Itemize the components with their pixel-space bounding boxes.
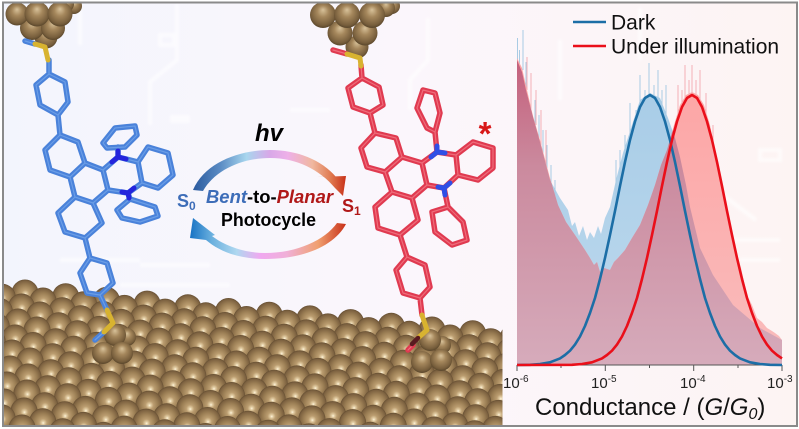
blue molecule S0: [25, 41, 173, 340]
x axis title: Conductance / (G/G: [535, 394, 748, 421]
label: hv: hv: [255, 120, 285, 147]
label: Bent-to-Planar: Bent-to-Planar: [206, 187, 334, 207]
tick labels: 10: [767, 375, 784, 392]
tick labels: -3: [784, 374, 793, 385]
tick labels: -5: [608, 374, 617, 385]
red adatom cluster: [411, 329, 452, 373]
overlap of histograms: [517, 58, 782, 365]
blue histogram: [517, 60, 782, 365]
legend: Under illumination: [611, 36, 779, 58]
illumination gaussian fit: [517, 95, 782, 365]
red histogram: [517, 58, 782, 365]
x axis title: 0: [748, 406, 757, 423]
dark gaussian fit: [517, 95, 782, 365]
blue histogram spikes: [518, 30, 666, 200]
gold tips: [4, 4, 504, 66]
label: S1: 1: [354, 204, 361, 218]
blue adatom cluster: [92, 324, 136, 364]
label: S0: 0: [189, 199, 196, 213]
tick labels: -4: [697, 374, 706, 385]
label: S1: S: [342, 196, 354, 216]
x axis title: ): [757, 394, 765, 421]
bottom cycle arrow: [190, 218, 346, 259]
red histogram spikes: [527, 57, 713, 165]
label: S0: S: [177, 191, 189, 211]
tick labels: 10: [591, 375, 608, 392]
top cycle arrow: [193, 150, 346, 196]
x axis: [517, 365, 782, 371]
tick labels: 10: [680, 375, 697, 392]
legend: [573, 12, 779, 58]
tick labels: -6: [520, 374, 529, 385]
legend: Dark: [611, 12, 656, 34]
tick labels: 10: [503, 375, 520, 392]
red molecule S1: [333, 50, 493, 350]
tick labels: [503, 374, 793, 392]
asterisk: *: [479, 115, 492, 152]
conductance histogram chart: [517, 30, 782, 371]
gold surface: [4, 270, 502, 425]
label: Photocycle: Photocycle: [221, 210, 316, 230]
